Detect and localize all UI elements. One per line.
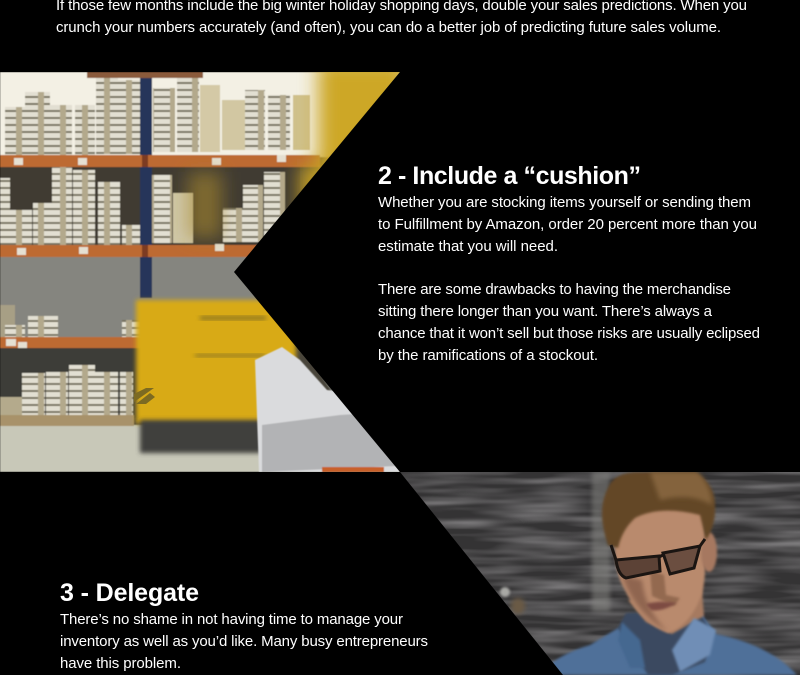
heading: 3 - Delegate: 3 - Delegate xyxy=(60,579,199,607)
text block: cushion paragraph one xyxy=(378,194,757,255)
text block: cushion paragraph one: Whether you are stocking items yourself or sending them xyxy=(378,194,751,211)
text block: delegate paragraph xyxy=(60,611,428,672)
text block: delegate paragraph: inventory as well as you’d like. Many busy entrepreneurs xyxy=(60,633,428,650)
photo: man in glasses xyxy=(400,472,800,675)
text block: cushion paragraph one: estimate that you will need. xyxy=(378,238,558,255)
intro text xyxy=(56,0,747,36)
text block: cushion paragraph two: chance that it won’t sell but those risks are usually eclipsed xyxy=(378,325,760,342)
black diagonal panel xyxy=(0,472,563,675)
text block: cushion paragraph two: There are some drawbacks to having the merchandise xyxy=(378,281,731,298)
photo: warehouse shelves with forklift xyxy=(0,60,408,472)
text block: delegate paragraph: have this problem. xyxy=(60,655,181,672)
text block: cushion paragraph two: sitting there longer than you want. There’s always a xyxy=(378,303,713,320)
forklift xyxy=(134,300,296,453)
text block: delegate paragraph: There’s no shame in not having time to manage your xyxy=(60,611,403,628)
yellow motion blur xyxy=(188,60,408,255)
wrapped pallet xyxy=(254,346,400,472)
text block: cushion paragraph one: to Fulfillment by Amazon, order 20 percent more than you xyxy=(378,216,757,233)
text block: cushion paragraph two xyxy=(378,281,760,364)
heading: 2 - Include a cushion: 2 - Include a “cushion” xyxy=(378,162,641,190)
intro text: crunch your numbers accurately (and often), you can do a better job of predicting future sales volume. xyxy=(56,19,721,36)
black arrow panel xyxy=(234,72,800,472)
text block: cushion paragraph two: by the ramifications of a stockout. xyxy=(378,347,598,364)
